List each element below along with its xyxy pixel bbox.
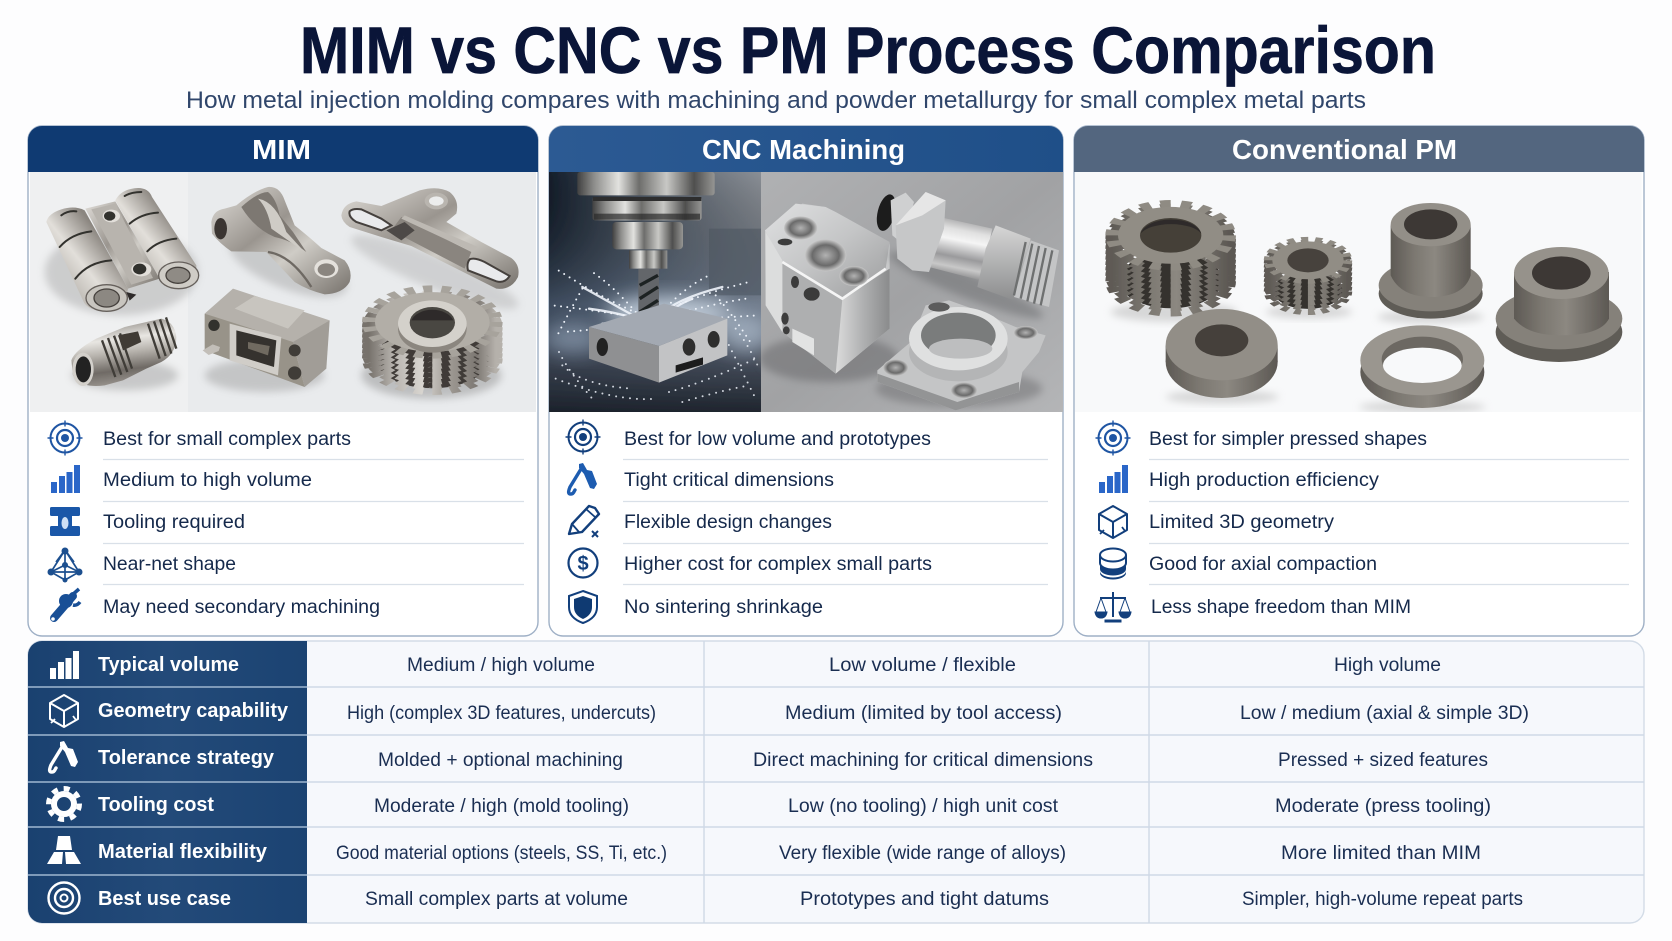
icon: bars <box>1099 465 1128 493</box>
icon: pencil <box>569 506 599 537</box>
big gear <box>1112 204 1229 313</box>
washer <box>1166 309 1278 398</box>
row: Tolerance strategy <box>50 741 1488 772</box>
panel: Conventional PM <box>1074 126 1644 636</box>
flange <box>876 300 1046 410</box>
text: Near-net shape <box>103 554 236 575</box>
feature list: PM <box>1095 420 1629 622</box>
icon: target <box>1096 420 1130 456</box>
text: Best for small complex parts <box>103 429 351 450</box>
icon: stack <box>1100 548 1126 580</box>
text: Best for simpler pressed shapes <box>1149 429 1427 450</box>
panel: CNC Machining <box>542 126 1063 636</box>
row: Best use case: Prototypes and tight datums <box>800 889 1049 910</box>
spindle <box>577 172 715 327</box>
icon: dollar <box>568 548 598 578</box>
small gear <box>1269 239 1347 313</box>
text: Tooling required <box>103 512 245 533</box>
text: Limited 3D geometry <box>1149 512 1335 533</box>
feature list: CNC <box>566 420 1048 623</box>
row: Tolerance strategy: Tolerance strategy <box>98 747 275 769</box>
text: Flexible design changes <box>624 512 832 533</box>
header: MIM <box>28 126 538 172</box>
header: Conventional PM: Conventional PM <box>1232 134 1457 165</box>
image: PM parts <box>1105 200 1622 412</box>
row: Geometry capability <box>50 695 1529 727</box>
row: Typical volume <box>50 651 1441 679</box>
ported block <box>759 204 899 382</box>
row: Tooling cost: Moderate (press tooling) <box>1275 796 1491 817</box>
threaded part <box>71 317 176 386</box>
row: Geometry capability: Geometry capability <box>98 700 289 722</box>
panel: MIM <box>28 126 538 636</box>
row: Tolerance strategy: Direct machining for critical dimensions <box>753 750 1093 771</box>
icon: mold tooling <box>50 507 80 536</box>
icon: target <box>566 420 600 454</box>
text: Good for axial compaction <box>1149 554 1377 575</box>
arm <box>341 188 519 289</box>
connector <box>203 289 330 387</box>
feature list: MIM <box>48 420 524 621</box>
row: Tooling cost: Tooling cost <box>98 794 214 816</box>
comparison table <box>28 641 1644 923</box>
row: Best use case <box>48 882 1523 914</box>
text: Tight critical dimensions <box>624 470 834 491</box>
text: Best for low volume and prototypes <box>624 429 931 450</box>
row: Typical volume: Typical volume <box>98 654 239 676</box>
row: Geometry capability: High (complex 3D features, undercuts) <box>347 703 656 724</box>
bushing 2 <box>1496 247 1622 362</box>
text: Less shape freedom than MIM <box>1151 597 1411 618</box>
bracket <box>211 187 351 294</box>
row: Geometry capability: Low / medium (axial & simple 3D) <box>1240 703 1529 724</box>
image: CNC machining and parts <box>542 172 1063 412</box>
row: Best use case: Small complex parts at volume <box>365 889 628 910</box>
row: Material flexibility: More limited than MIM <box>1281 843 1481 864</box>
row: Tolerance strategy: Pressed + sized features <box>1278 750 1488 771</box>
row: Typical volume: High volume <box>1334 655 1441 676</box>
subtitle: How metal injection molding compares with machining and powder metallurgy for small complex metal parts <box>186 87 1366 114</box>
row: Tooling cost <box>48 788 1491 820</box>
row: Typical volume: Low volume / flexible <box>829 655 1016 676</box>
icon: target <box>48 420 82 456</box>
header: MIM: MIM <box>252 134 311 165</box>
icon: wrench <box>51 589 80 621</box>
header: Conventional PM <box>1074 126 1644 172</box>
icon: cube <box>1099 506 1127 538</box>
icon: network shape <box>48 548 82 582</box>
gear <box>369 289 496 391</box>
bushing 1 <box>1379 203 1483 319</box>
row: Best use case: Best use case <box>98 888 231 910</box>
text: Medium to high volume <box>103 470 312 491</box>
image: MIM parts <box>30 172 536 412</box>
title: MIM vs CNC vs PM Process Comparison <box>300 13 1436 87</box>
row: Typical volume: Medium / high volume <box>407 655 595 676</box>
row: Material flexibility: Good material options (steels, SS, Ti, etc.) <box>336 843 667 864</box>
icon: dollar: $ <box>577 553 589 575</box>
text: No sintering shrinkage <box>624 597 823 618</box>
icon: caliper <box>569 463 597 494</box>
splash <box>552 269 759 402</box>
header: CNC Machining <box>549 126 1063 172</box>
text: High production efficiency <box>1149 470 1380 491</box>
ring <box>1360 325 1484 408</box>
header: CNC Machining: CNC Machining <box>702 134 905 165</box>
row: Tooling cost: Moderate / high (mold tooling) <box>374 796 629 817</box>
hinge <box>46 188 199 311</box>
row: Best use case: Simpler, high-volume repeat parts <box>1242 889 1523 910</box>
fitting <box>873 192 1059 328</box>
row: Geometry capability: Medium (limited by tool access) <box>785 703 1062 724</box>
icon: shield <box>569 591 597 623</box>
row: Tolerance strategy: Molded + optional machining <box>378 750 623 771</box>
icon: scales <box>1095 592 1131 622</box>
text: Higher cost for complex small parts <box>624 554 932 575</box>
row: Material flexibility: Very flexible (wide range of alloys) <box>779 843 1066 864</box>
text: May need secondary machining <box>103 597 380 618</box>
milled block <box>589 304 727 383</box>
row: Material flexibility: Material flexibility <box>98 841 268 863</box>
row: Material flexibility <box>47 836 1481 864</box>
row: Tooling cost: Low (no tooling) / high unit cost <box>788 796 1059 817</box>
icon: bars <box>51 465 80 493</box>
